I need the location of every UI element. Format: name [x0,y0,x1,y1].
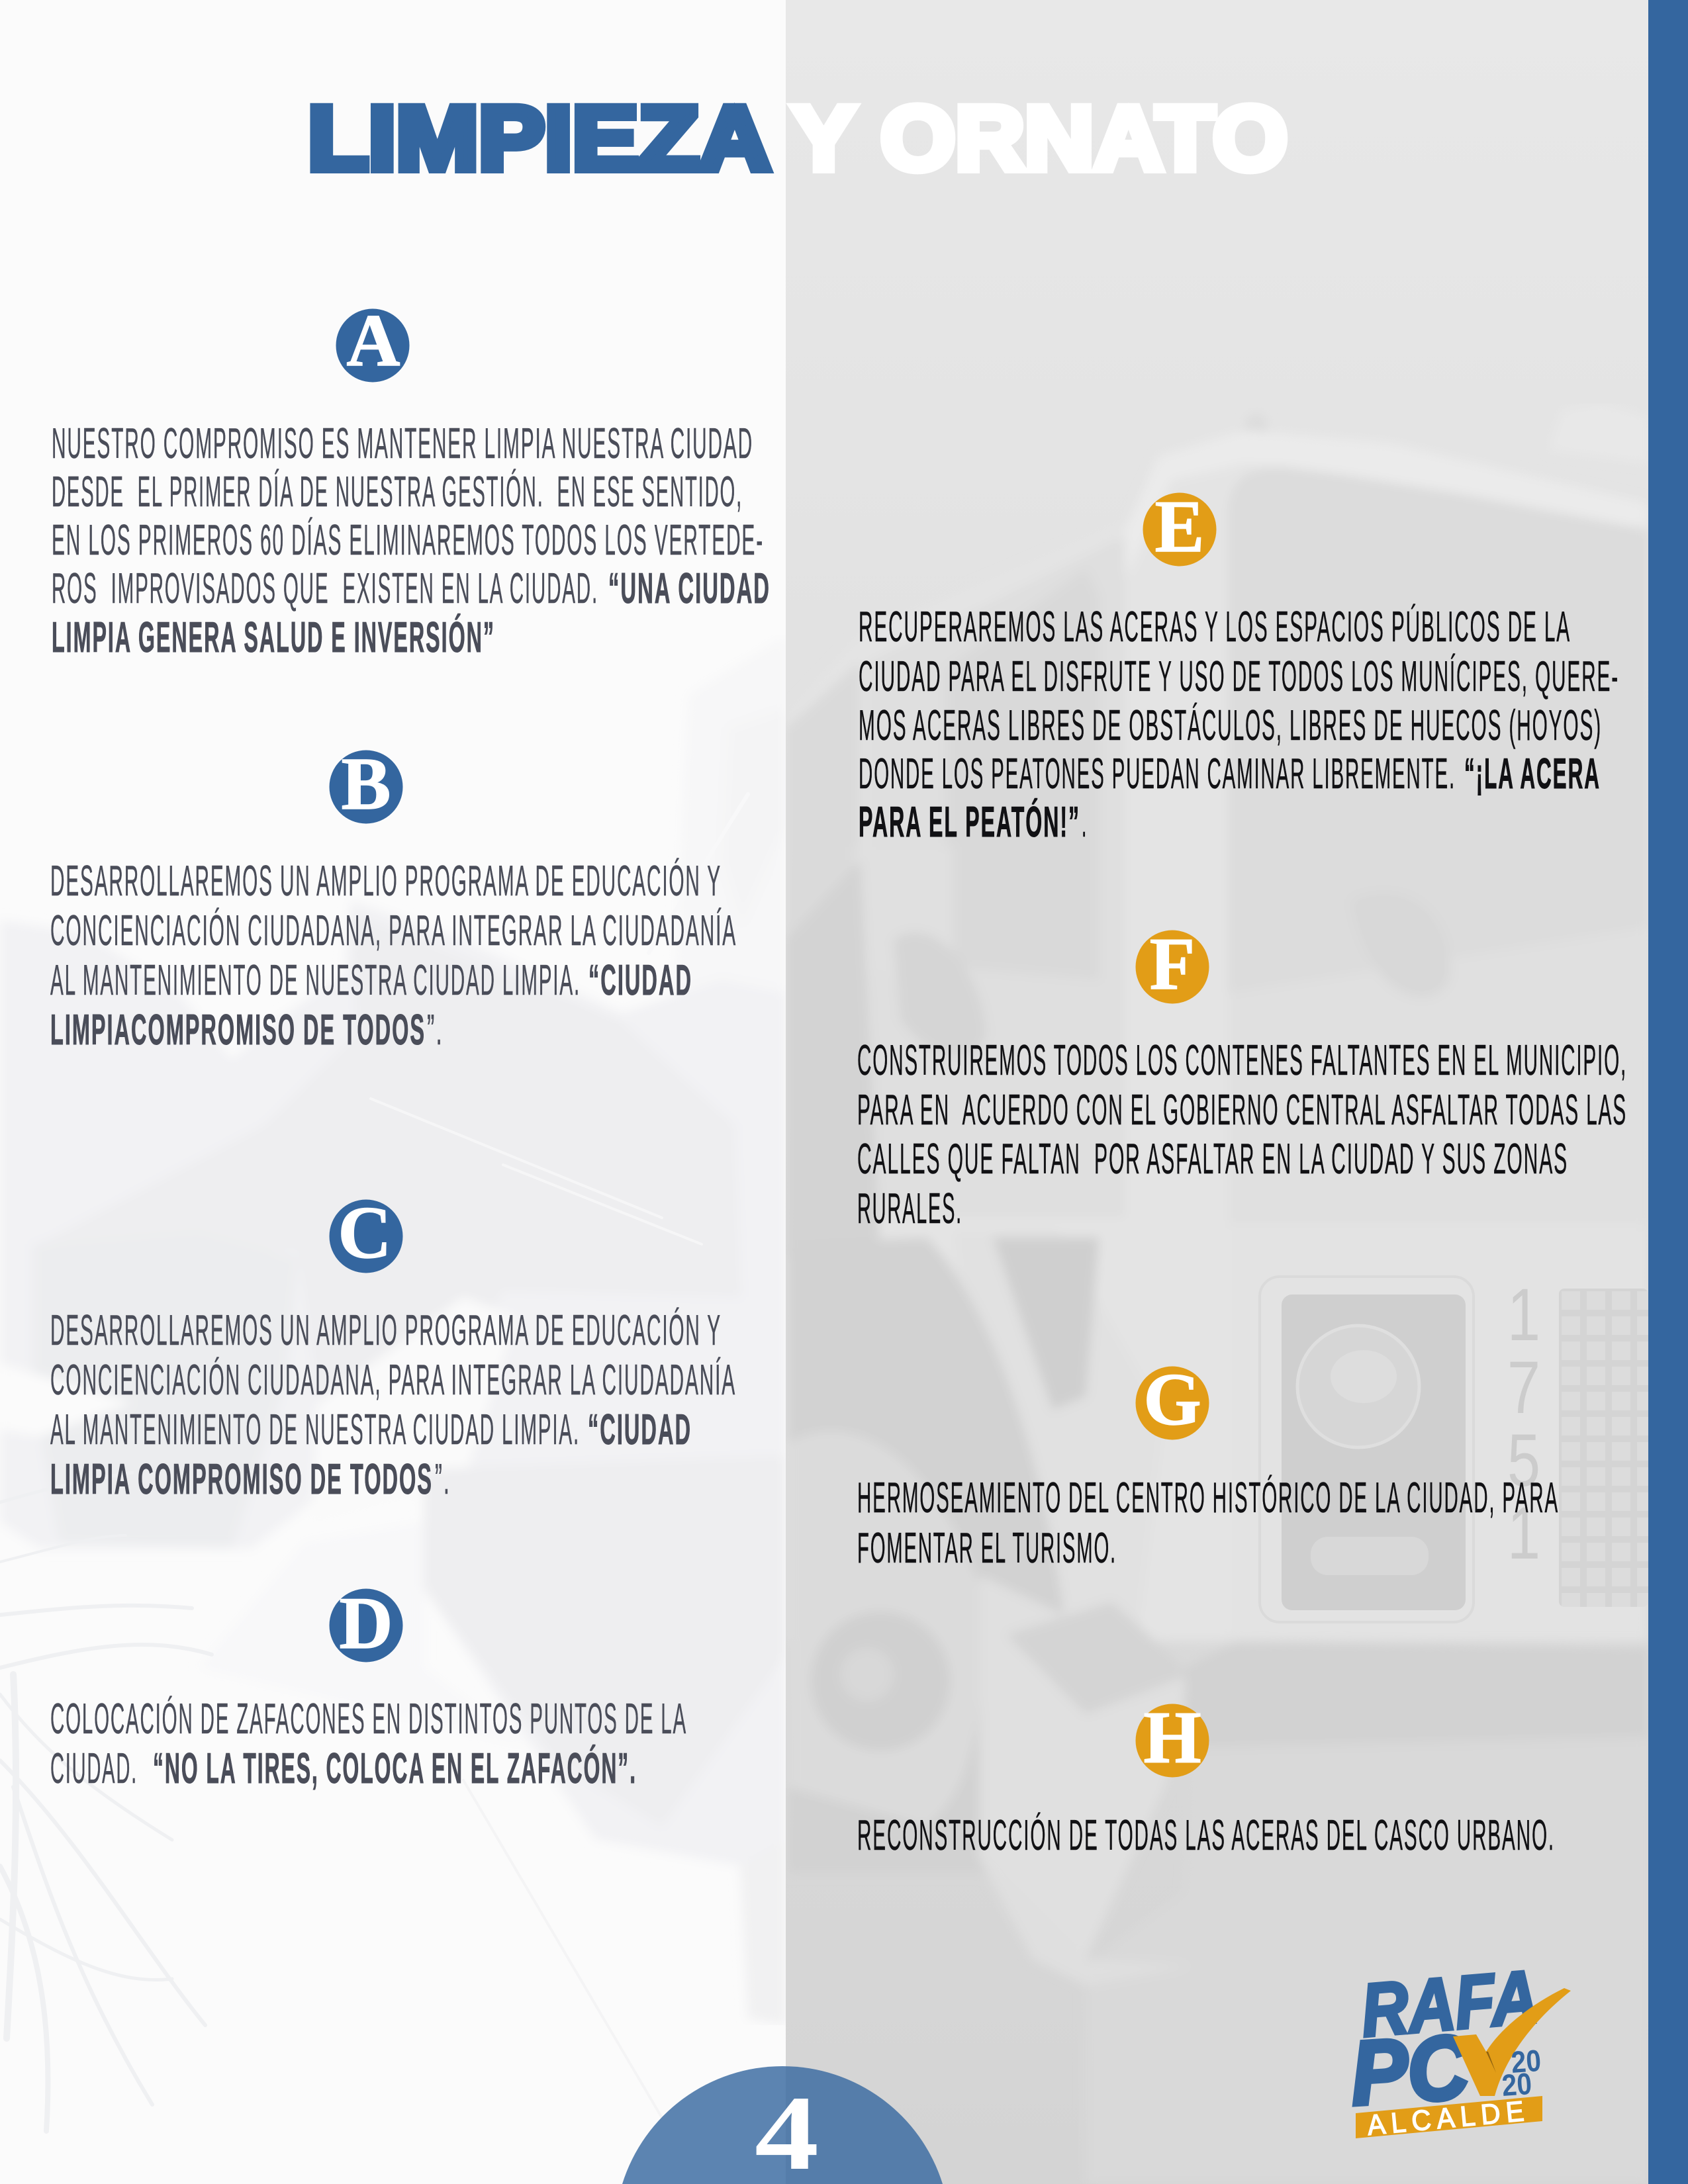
background truck number: 5 [1507,1419,1540,1502]
badge H: H [1143,1697,1201,1779]
text block C [50,1306,736,1503]
background left panel: faded truck photo [0,704,786,2134]
badge E [1143,486,1217,568]
logo: Rafa PC Alcalde 2020: ALCALDE [1366,2095,1531,2142]
text block B: LIMPIACOMPROMISO DE TODOS [50,1005,426,1054]
text block B: AL MANTENIMIENTO DE NUESTRA CIUDAD LIMPIA. [50,956,581,1004]
text block G: FOMENTAR EL TURISMO. [857,1524,1117,1572]
text block D: “NO LA TIRES, COLOCA EN EL ZAFACÓN”. [153,1744,637,1792]
background right panel: faded truck photo [786,0,1648,2184]
background truck number: 7 [1507,1346,1540,1429]
text block C: ”. [435,1455,451,1503]
background truck number [1509,1289,1538,1559]
text block E: PARA EL PEATÓN!” [859,797,1080,846]
text: COLOCACIÓN DE ZAFACONES EN DISTINTOS PUNTOS DE LA [50,1694,687,1743]
title: Y ORNATO [792,88,1288,189]
text block F: RURALES. [857,1184,962,1232]
badge G: G [1143,1359,1201,1441]
badge F: F [1150,923,1195,1005]
logo: Rafa PC Alcalde 2020 [1348,1954,1571,2142]
text: DESARROLLAREMOS UN AMPLIO PROGRAMA DE EDUCACIÓN Y [50,1306,722,1354]
text block C: LIMPIA COMPROMISO DE TODOS [50,1455,433,1503]
background truck number: 1 [1507,1273,1540,1356]
text: CONCIENCIACIÓN CIUDADANA, PARA INTEGRAR LA CIUDADANÍA [50,1355,736,1404]
badge F [1136,923,1209,1005]
text block G [857,1473,1559,1572]
text block D [50,1694,687,1792]
badge D: D [340,1582,393,1664]
page number badge [622,2066,943,2184]
text block D: CIUDAD. [50,1744,138,1792]
text block A [52,419,771,661]
badge A: A [347,300,400,382]
text block C: “CIUDAD [588,1405,692,1453]
title [308,88,1288,189]
logo: Rafa PC Alcalde 2020: RAFA [1358,1954,1541,2052]
text block A: ROS IMPROVISADOS QUE EXISTEN EN LA CIUDAD. [52,564,598,612]
logo: Rafa PC Alcalde 2020: PC [1348,2016,1473,2124]
title: LIMPIEZA [308,88,771,189]
badge E: E [1155,486,1204,568]
background truck number: 1 [1507,1492,1540,1574]
text block E [859,602,1619,846]
text: EN LOS PRIMEROS 60 DÍAS ELIMINAREMOS TODOS LOS VERTEDE- [52,516,764,564]
text block A: “UNA CIUDAD [608,564,771,612]
text: NUESTRO COMPROMISO ES MANTENER LIMPIA NUESTRA CIUDAD [52,419,753,467]
background truck grille [1559,1289,1648,1607]
text block B: “CIUDAD [588,956,692,1004]
text block B: ”. [427,1005,444,1054]
right side bar [1648,0,1688,2184]
text: DESDE EL PRIMER DÍA DE NUESTRA GESTIÓN. EN ESE SENTIDO, [52,467,743,516]
badge B [330,743,402,825]
text block F [857,1036,1627,1232]
badge C: C [338,1192,391,1274]
text: DESARROLLAREMOS UN AMPLIO PROGRAMA DE EDUCACIÓN Y [50,856,722,905]
background headlight housing [1260,1277,1474,1622]
text block C: AL MANTENIMIENTO DE NUESTRA CIUDAD LIMPIA. [50,1405,580,1453]
logo: Rafa PC Alcalde 2020: 20 [1501,2066,1533,2103]
text: CONCIENCIACIÓN CIUDADANA, PARA INTEGRAR LA CIUDADANÍA [50,906,737,954]
logo: Rafa PC Alcalde 2020: 20 [1510,2043,1542,2079]
text block B [50,856,737,1054]
badge B: B [342,743,391,825]
text block A: LIMPIA GENERA SALUD E INVERSIÓN” [52,613,495,661]
text block E: . [1082,797,1088,846]
